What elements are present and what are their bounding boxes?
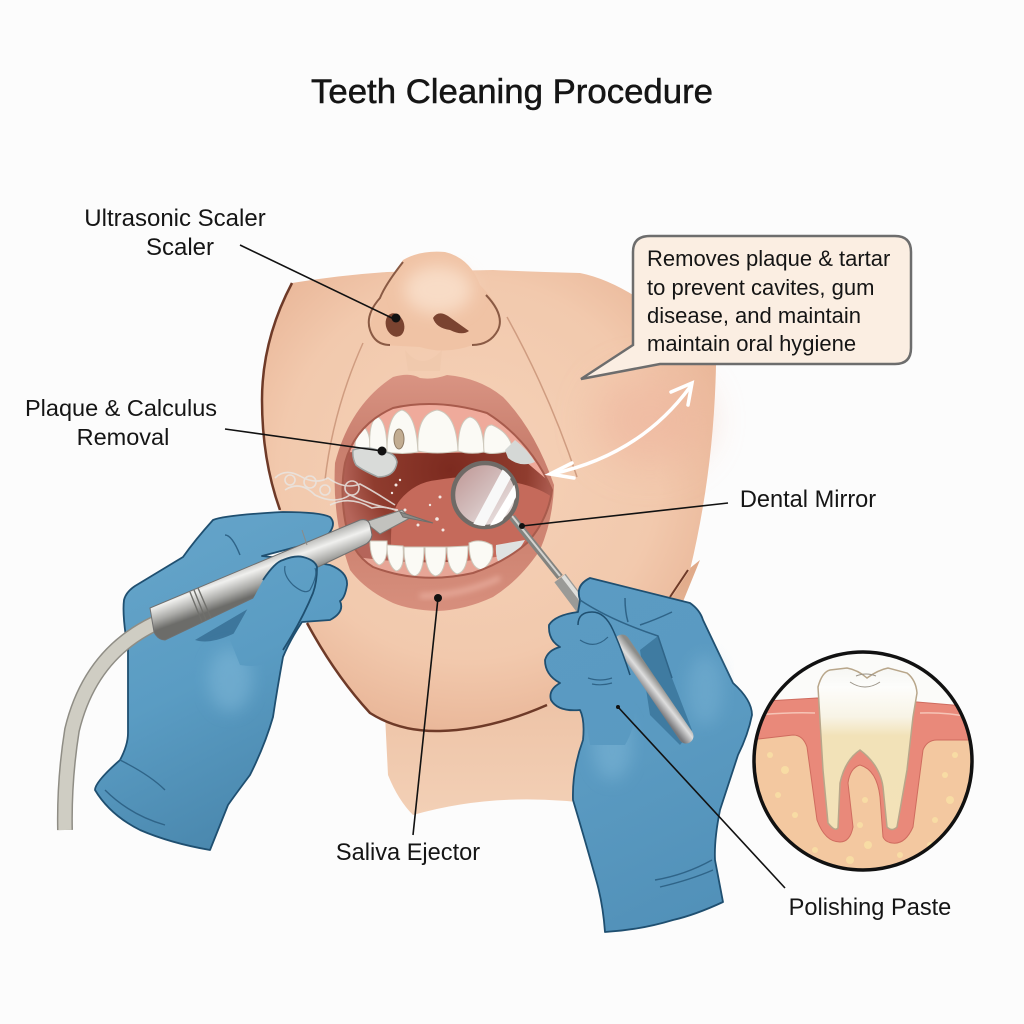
callout: maintain oral hygiene [647, 331, 856, 356]
glove highlights [592, 710, 632, 780]
palm shadow under handle [195, 590, 280, 641]
label: Ultrasonic Scaler: Ultrasonic Scaler [84, 205, 266, 232]
inner lip edge [342, 404, 552, 578]
glove creases [105, 535, 290, 825]
title: Teeth Cleaning Procedure [311, 73, 713, 111]
water spray [275, 472, 400, 512]
label: Polishing Paste: Polishing Paste [789, 895, 951, 921]
arrow: double-headed white arrow [550, 383, 692, 478]
shadow under handle [640, 636, 692, 745]
oral cavity [344, 405, 551, 577]
jaw bone [756, 736, 970, 868]
callout: Removes plaque & tartar [647, 246, 890, 271]
grey back teeth [505, 440, 535, 464]
label: Saliva Ejector: Saliva Ejector [336, 840, 480, 866]
mirror head [453, 463, 517, 527]
calculus deposit on tooth [394, 429, 404, 449]
label: Dental Mirror: Dental Mirror [740, 487, 876, 513]
label: Ultrasonic Scaler: Scaler [146, 234, 214, 261]
lower gum [363, 556, 498, 577]
gum [750, 698, 976, 843]
tongue [391, 477, 552, 560]
leader dots [378, 314, 620, 709]
thumb over handle [578, 612, 635, 745]
index finger crease [580, 598, 672, 678]
mirror handle [512, 517, 560, 577]
label: Plaque & Calculus Removal: Plaque & Calculus [25, 395, 217, 421]
tooth [818, 668, 917, 830]
mirror ferrule [560, 578, 584, 610]
illustration: left glove holding ultrasonic scaler [65, 510, 433, 850]
lower lip highlight [420, 578, 500, 596]
upper teeth [355, 410, 512, 454]
illustration: nose [369, 252, 501, 371]
inset: tooth cross-section [750, 652, 976, 875]
cuff creases [655, 860, 713, 887]
plaque and calculus buildup [353, 448, 397, 477]
lower teeth [370, 541, 493, 576]
tongue droplets [391, 479, 444, 532]
tip of ultrasonic scaler [365, 510, 410, 534]
mirror handle in hand [622, 642, 686, 736]
glove body [95, 512, 347, 850]
illustration: right glove holding mirror [545, 578, 752, 932]
leader lines [225, 245, 785, 888]
callout [581, 236, 911, 379]
label: Plaque & Calculus Removal: Removal [77, 424, 169, 450]
thumb over handpiece [230, 556, 317, 666]
glove highlight [208, 648, 252, 712]
callout: disease, and maintain [647, 303, 861, 328]
illustration: dental mirror [453, 463, 586, 610]
bone texture [767, 752, 958, 864]
illustration: neck [385, 560, 700, 815]
lips [335, 375, 554, 611]
glove body [545, 578, 752, 932]
cable [65, 624, 154, 830]
callout: to prevent cavites, gum [647, 275, 874, 300]
illustration: mouth [330, 375, 560, 611]
illustration: face [262, 270, 716, 731]
handpiece [150, 520, 372, 640]
gums [350, 405, 545, 478]
